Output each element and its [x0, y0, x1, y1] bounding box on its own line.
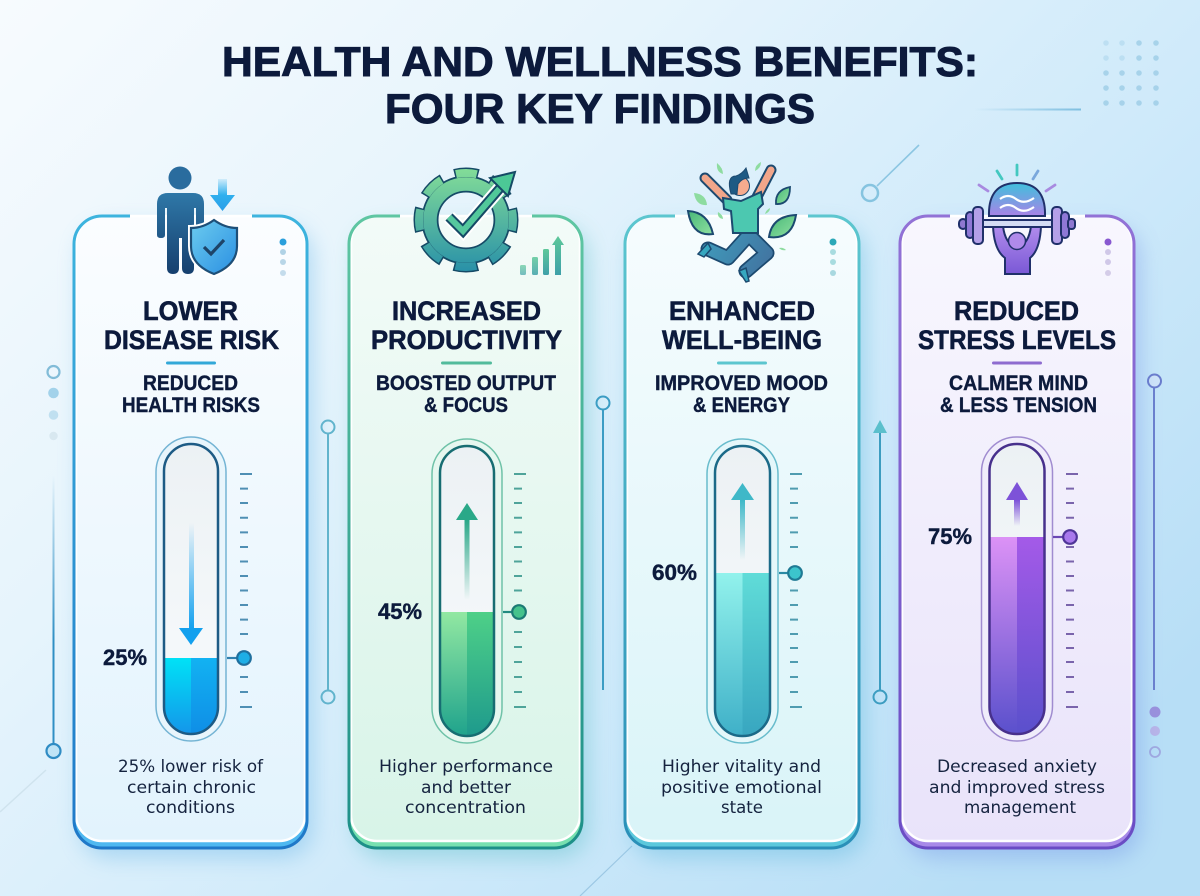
- heading: WELL-BEING: [662, 325, 822, 355]
- panel: lower disease risk: [74, 166, 313, 858]
- side connector: left: [46, 366, 60, 758]
- description: and improved stress: [929, 778, 1105, 797]
- description: Higher performance: [379, 757, 553, 776]
- side connector: 3 to 4 with arrow: [873, 420, 887, 704]
- percentage label: 45%: [378, 599, 422, 624]
- heading: [918, 296, 1116, 355]
- description: management: [964, 798, 1077, 817]
- heading: PRODUCTIVITY: [371, 325, 562, 355]
- subheading: & LESS TENSION: [940, 394, 1097, 417]
- description: [118, 757, 264, 817]
- percentage label: 25%: [103, 645, 147, 670]
- percentage label: 60%: [652, 560, 697, 585]
- heading: INCREASED: [392, 296, 541, 326]
- heading: [104, 296, 279, 355]
- heading: STRESS LEVELS: [918, 325, 1116, 355]
- heading: LOWER: [143, 296, 238, 326]
- subheading: HEALTH RISKS: [122, 394, 260, 417]
- subheading: CALMER MIND: [949, 372, 1088, 395]
- subheading: [655, 372, 828, 417]
- icon: brain dome and barbell lifter: [959, 165, 1075, 274]
- description: concentration: [405, 798, 526, 817]
- description: 25% lower risk of: [118, 757, 264, 776]
- side connector: right: [1148, 374, 1161, 757]
- description: [661, 757, 822, 817]
- subheading: BOOSTED OUTPUT: [376, 372, 556, 395]
- title: HEALTH AND WELLNESS BENEFITS:: [222, 38, 978, 85]
- subheading: & FOCUS: [424, 394, 508, 417]
- subheading: [122, 372, 260, 417]
- heading: ENHANCED: [669, 296, 815, 326]
- title: FOUR KEY FINDINGS: [385, 85, 815, 132]
- description: conditions: [146, 798, 235, 817]
- subheading: REDUCED: [143, 372, 238, 395]
- panel: enhanced well-being: [625, 162, 865, 858]
- description: state: [721, 798, 763, 817]
- progress dots: [830, 238, 836, 276]
- icon: small bar chart: [520, 236, 564, 275]
- heading: DISEASE RISK: [104, 325, 279, 355]
- description: and better: [421, 778, 511, 797]
- side connector: 2 to 3: [596, 396, 610, 690]
- heading: [662, 296, 822, 355]
- title: [222, 38, 978, 132]
- description: [929, 757, 1105, 817]
- subheading: & ENERGY: [693, 394, 790, 417]
- progress dots: [280, 238, 286, 276]
- description: Decreased anxiety: [937, 757, 1097, 776]
- subheading: [376, 372, 556, 417]
- panel: increased productivity: [349, 172, 588, 858]
- description: certain chronic: [127, 778, 256, 797]
- heading: REDUCED: [954, 296, 1079, 326]
- thermometer gauge 45%: [432, 439, 526, 743]
- side connector: 1 to 2: [322, 420, 334, 704]
- thermometer gauge 25%: [156, 437, 252, 741]
- description: [379, 757, 553, 817]
- description: Higher vitality and: [662, 757, 821, 776]
- progress dots: [1104, 238, 1112, 276]
- thermometer gauge 75%: [982, 437, 1078, 741]
- description: positive emotional: [661, 778, 822, 797]
- panel: reduced stress levels: [900, 165, 1140, 858]
- subheading: IMPROVED MOOD: [655, 372, 828, 395]
- icon: gear with check arrow: [419, 172, 515, 267]
- thermometer gauge 60%: [707, 439, 802, 743]
- icon: person with shield and down arrow: [157, 166, 237, 274]
- icon: jumping person with leaves: [688, 162, 796, 282]
- percentage label: 75%: [928, 524, 972, 549]
- subheading: [940, 372, 1097, 417]
- heading: [371, 296, 562, 355]
